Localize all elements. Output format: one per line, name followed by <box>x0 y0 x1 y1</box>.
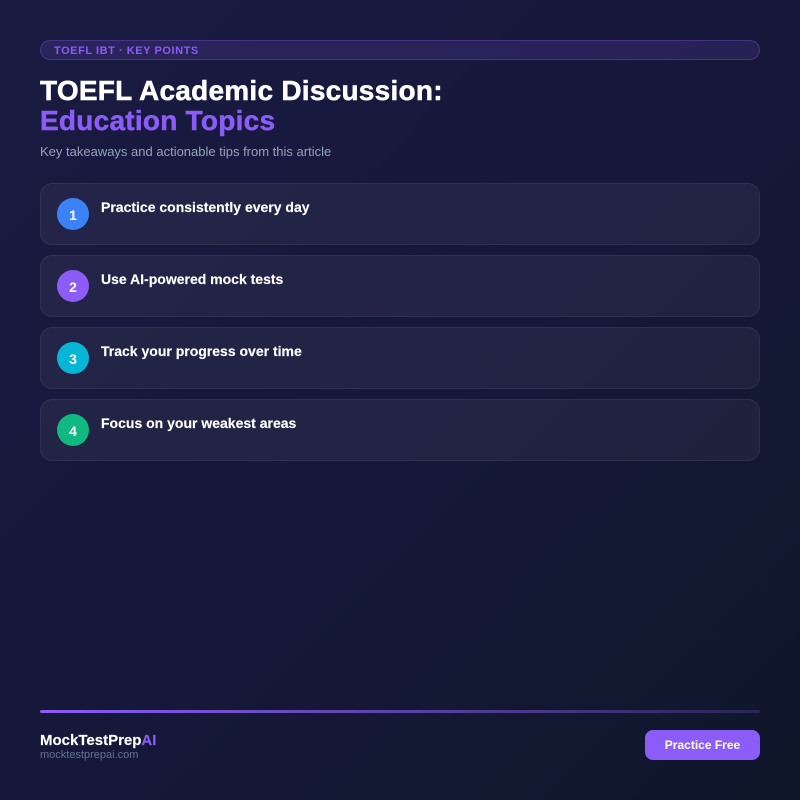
number badge 3 <box>57 342 89 374</box>
number badge 2: 2 <box>69 279 77 295</box>
tip 4 text: Focus on your weakest areas <box>101 415 296 431</box>
number badge 4 <box>57 414 89 446</box>
title: TOEFL Academic Discussion: <box>40 75 443 106</box>
subtitle: Key takeaways and actionable tips from this article <box>40 144 331 159</box>
title <box>40 75 443 136</box>
card: tip 3 <box>40 327 760 389</box>
call-to-action button: Practice Free <box>665 738 740 752</box>
number badge 4: 4 <box>69 423 77 439</box>
call-to-action button <box>645 730 760 760</box>
number badge 1 <box>57 198 89 230</box>
tip 2 text: Use AI-powered mock tests <box>101 271 283 287</box>
number badge 1: 1 <box>69 207 77 223</box>
number badge 2 <box>57 270 89 302</box>
card: tip 4 <box>40 399 760 461</box>
card: tip 2 <box>40 255 760 317</box>
tip 1 text: Practice consistently every day <box>101 199 310 215</box>
badge: TOEFL iBT key points: TOEFL IBT · KEY POINTS <box>54 45 199 57</box>
card: tip 1 <box>40 183 760 245</box>
brand URL: mocktestprepai.com <box>40 749 138 761</box>
badge: TOEFL iBT key points <box>40 40 760 60</box>
title: Education Topics <box>40 105 275 136</box>
number badge 3: 3 <box>69 351 77 367</box>
tip 3 text: Track your progress over time <box>101 343 302 359</box>
footer accent bar <box>40 710 760 713</box>
brand name: MockTestPrepAI <box>40 732 156 749</box>
footer brand <box>40 732 156 761</box>
